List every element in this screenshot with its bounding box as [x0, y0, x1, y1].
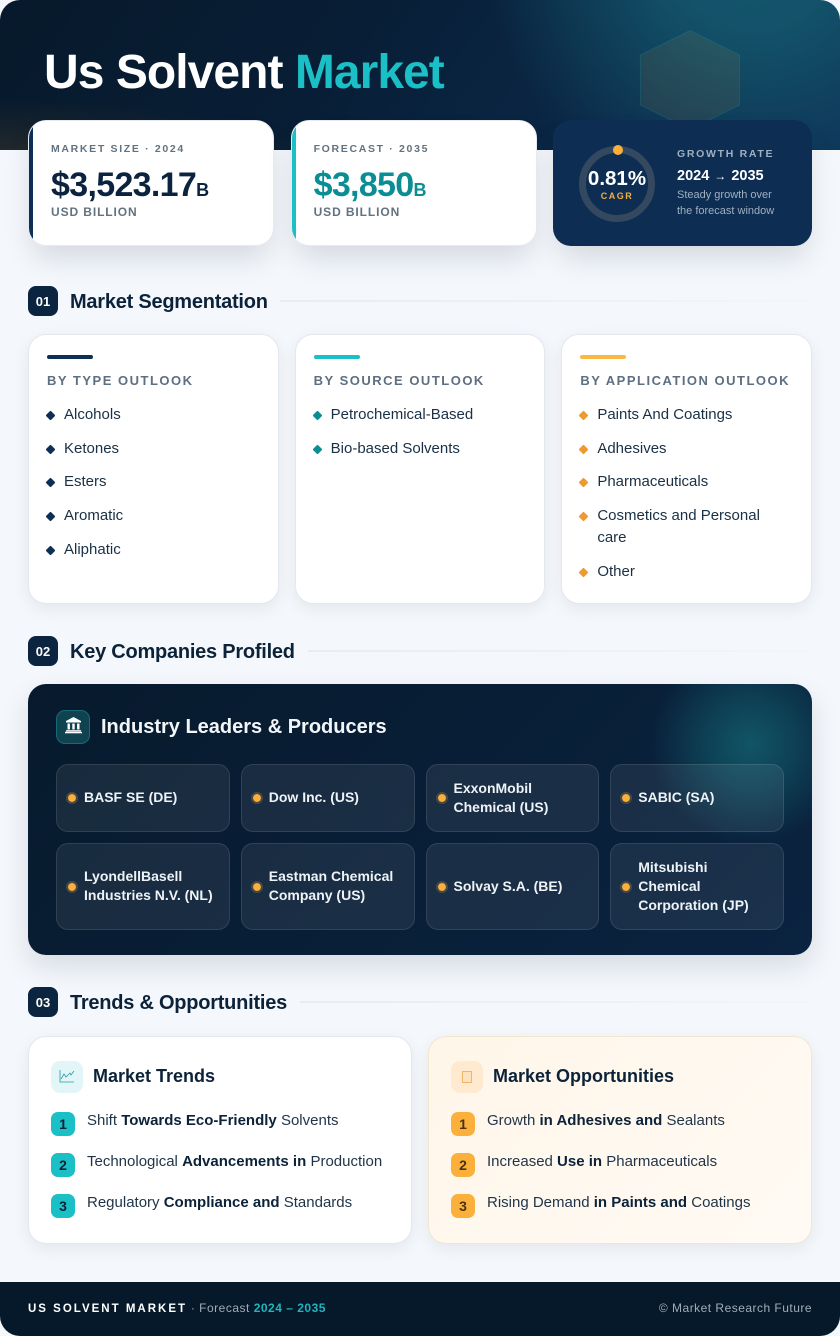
section heading: Trends & Opportunities: Trends & Opportunities	[70, 992, 287, 1014]
accent edge	[291, 120, 296, 246]
company: Mitsubishi	[610, 843, 784, 930]
ring marker	[613, 145, 623, 155]
stat card: forecast	[291, 120, 537, 246]
panel heading: Market Trends	[93, 1066, 215, 1086]
panel: market trends	[28, 1036, 412, 1244]
CAGR value: 0.81%	[588, 167, 646, 190]
bullet	[46, 477, 55, 487]
section badge 03: 03	[36, 995, 50, 1010]
status dot	[66, 792, 78, 804]
panel: by application outlook	[561, 334, 812, 604]
growth note: Steady growth over	[677, 189, 772, 201]
growth note	[677, 189, 774, 216]
section badge 02	[28, 636, 58, 666]
item: care	[597, 529, 627, 546]
growth period: 2024 → 2035	[677, 168, 764, 184]
item: Alcohols	[64, 406, 121, 423]
bullet	[312, 410, 322, 420]
company: SABIC	[610, 764, 784, 832]
company name: BASF SE (DE)	[84, 789, 177, 805]
panel heading: BY APPLICATION OUTLOOK	[580, 373, 790, 388]
number 1	[51, 1112, 75, 1136]
company name: SABIC (SA)	[638, 789, 714, 805]
item: Aliphatic	[64, 541, 121, 558]
status dot	[620, 792, 632, 804]
status dot	[620, 880, 632, 892]
company name: Chemical (US)	[454, 799, 548, 815]
growth label: GROWTH RATE	[677, 148, 774, 160]
status dot	[66, 880, 78, 892]
footer title: US SOLVENT MARKET · Forecast 2024 – 2035	[28, 1301, 326, 1315]
company name: Corporation (JP)	[638, 897, 749, 913]
company name: Industries N.V. (NL)	[84, 887, 213, 903]
item: Aromatic	[64, 507, 123, 524]
label: FORECAST · 2035	[314, 143, 429, 155]
bullet	[579, 410, 589, 420]
section heading: Market Segmentation: Market Segmentation	[70, 291, 268, 313]
company: Dow	[241, 764, 414, 832]
number 2	[51, 1153, 75, 1177]
trend 2: Technological Advancements in Production	[87, 1153, 382, 1170]
company name: Company (US)	[269, 887, 365, 903]
stat card: market size	[28, 120, 274, 246]
section badge 02: 02	[36, 644, 50, 659]
company name	[454, 780, 548, 815]
accent edge	[28, 120, 33, 246]
company name: Chemical	[638, 878, 700, 894]
number 2: 2	[459, 1157, 467, 1173]
decorative hexagon	[640, 30, 740, 120]
bullet	[46, 410, 55, 420]
number 2: 2	[59, 1157, 67, 1173]
value: $3,523.17B	[51, 166, 209, 204]
company: BASF	[56, 764, 230, 832]
status dot	[436, 880, 448, 892]
section heading: Key Companies Profiled: Key Companies Profiled	[70, 641, 295, 663]
item: Pharmaceuticals	[597, 473, 708, 490]
item: Adhesives	[597, 440, 667, 457]
panel: industry leaders	[28, 684, 812, 955]
bullet	[312, 444, 322, 454]
trend 1: Shift Towards Eco-Friendly Solvents	[87, 1112, 338, 1129]
number 3	[51, 1194, 75, 1218]
panel: by type outlook	[28, 334, 279, 604]
number 1: 1	[459, 1116, 467, 1132]
accent bar	[47, 355, 93, 359]
number 3	[451, 1194, 475, 1218]
company name: Dow Inc. (US)	[269, 789, 359, 805]
trend 3: Regulatory Compliance and Standards	[87, 1194, 352, 1211]
company name: Eastman Chemical	[269, 868, 393, 884]
opportunity 2: Increased Use in Pharmaceuticals	[487, 1153, 717, 1170]
company name: LyondellBasell	[84, 868, 182, 884]
bullet	[579, 567, 589, 577]
bullet	[579, 444, 589, 454]
item	[597, 507, 760, 546]
accent bar	[314, 355, 360, 359]
number 3: 3	[59, 1198, 67, 1214]
value: $3,850B	[314, 166, 427, 204]
section badge 01: 01	[36, 294, 50, 309]
bullet	[46, 545, 55, 555]
company name	[269, 868, 393, 903]
bullet	[46, 511, 55, 521]
panel: market opportunities	[428, 1036, 812, 1244]
bullet	[579, 511, 589, 521]
panel heading: BY TYPE OUTLOOK	[47, 373, 194, 388]
accent bar	[580, 355, 626, 359]
item: Esters	[64, 473, 107, 490]
item: Petrochemical-Based	[331, 406, 473, 423]
panel heading: Industry Leaders & Producers	[101, 716, 387, 738]
CAGR label: CAGR	[601, 191, 633, 201]
growth note: the forecast window	[677, 204, 774, 216]
company name: Mitsubishi	[638, 859, 707, 875]
footer credit: © Market Research Future	[659, 1301, 812, 1315]
section badge 03	[28, 987, 58, 1017]
number 2	[451, 1153, 475, 1177]
company: LyondellBasell	[56, 843, 230, 930]
panel: by source outlook	[295, 334, 545, 604]
company: ExxonMobil	[426, 764, 599, 832]
header band	[0, 0, 840, 150]
opportunity 1: Growth in Adhesives and Sealants	[487, 1112, 725, 1129]
icon: institution	[56, 710, 90, 744]
icon: opportunity	[451, 1061, 483, 1093]
unit: USD BILLION	[314, 205, 400, 219]
CAGR ring	[579, 146, 655, 222]
icon: line chart	[51, 1061, 83, 1093]
company: Solvay	[426, 843, 599, 930]
status dot	[251, 880, 263, 892]
company name: Solvay S.A. (BE)	[454, 878, 562, 894]
company: Eastman	[241, 843, 414, 930]
panel heading: Market Opportunities	[493, 1066, 674, 1086]
bullet	[46, 444, 55, 454]
opportunity 3: Rising Demand in Paints and Coatings	[487, 1194, 750, 1211]
item: Other	[597, 563, 635, 580]
label: MARKET SIZE · 2024	[51, 143, 185, 155]
item: Bio-based Solvents	[331, 440, 460, 457]
item: Ketones	[64, 440, 119, 457]
bullet	[579, 477, 589, 487]
number 1	[451, 1112, 475, 1136]
unit: USD BILLION	[51, 205, 138, 219]
item: Cosmetics and Personal	[597, 507, 760, 524]
title: Us Solvent Market	[44, 46, 444, 99]
number 3: 3	[459, 1198, 467, 1214]
growth rate card	[553, 120, 812, 246]
company name	[638, 859, 749, 913]
panel heading: BY SOURCE OUTLOOK	[314, 373, 485, 388]
footer	[0, 1282, 840, 1336]
company name	[84, 868, 213, 903]
status dot	[436, 792, 448, 804]
number 1: 1	[59, 1116, 67, 1132]
company name: ExxonMobil	[454, 780, 532, 796]
item: Paints And Coatings	[597, 406, 732, 423]
status dot	[251, 792, 263, 804]
section badge 01	[28, 286, 58, 316]
